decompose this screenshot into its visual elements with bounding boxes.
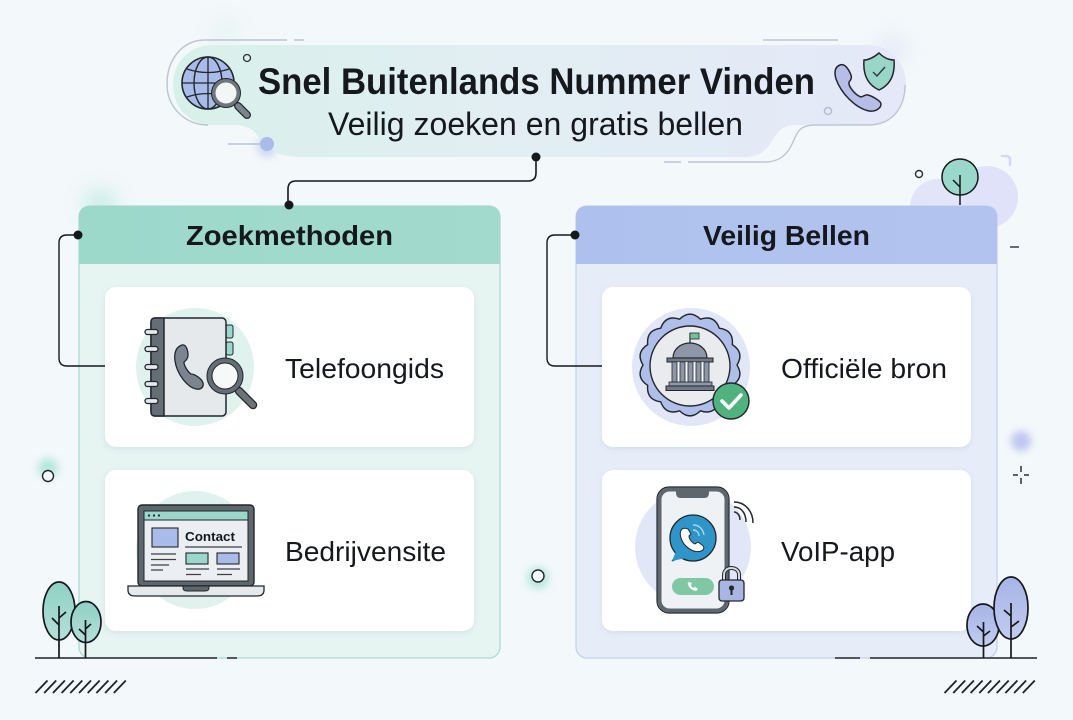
heading: Veilig Bellen: Veilig Bellen (703, 220, 870, 251)
label: Contact: Contact (185, 529, 236, 544)
decorative glows (38, 18, 908, 589)
connector: banner to left panel (284, 152, 540, 210)
title: Snel Buitenlands Nummer Vinden (258, 61, 815, 102)
hatching left (36, 680, 126, 693)
connector: left panel to Telefoongids (59, 230, 105, 366)
small ring left (42, 470, 54, 482)
card: VoIP-app (602, 470, 971, 631)
card: Officiële bron (602, 287, 971, 447)
label: Bedrijvensite: Bedrijvensite (285, 536, 446, 567)
header banner (167, 40, 906, 162)
panel: Zoekmethoden (79, 206, 500, 658)
sparkle (1013, 466, 1029, 484)
glow right (1011, 431, 1031, 451)
subtitle: Veilig zoeken en gratis bellen (328, 106, 743, 142)
icon: official seal with building (632, 308, 750, 426)
card: Bedrijvensite (105, 470, 474, 631)
trees left (43, 582, 101, 658)
icon: phone and shield (835, 53, 894, 111)
ground line left (35, 657, 237, 659)
banner outline left (167, 40, 304, 125)
icon: laptop with contact page (128, 491, 264, 609)
panel header: Veilig Bellen (576, 206, 997, 264)
panel: Veilig Bellen (576, 206, 997, 658)
icon: tree on right panel (942, 159, 978, 205)
icon: phone with VoIP app and lock (635, 487, 753, 613)
icon: globe with magnifier (182, 57, 247, 115)
label: Telefoongids: Telefoongids (285, 353, 444, 384)
ground line right (835, 657, 1037, 659)
decorative blobs behind right panel (910, 156, 1018, 235)
small ring (244, 54, 250, 62)
card: Telefoongids (105, 287, 474, 447)
hatching right (944, 680, 1035, 693)
small ring near tree (916, 170, 922, 178)
accent node (228, 137, 274, 151)
heading: Zoekmethoden: Zoekmethoden (186, 220, 393, 251)
label: Officiële bron: Officiële bron (781, 353, 947, 384)
small ring right (824, 108, 832, 114)
trees right (967, 577, 1028, 658)
banner outline right (664, 40, 905, 162)
label: VoIP-app: VoIP-app (781, 536, 895, 567)
dash right (1010, 246, 1019, 248)
panel header: Zoekmethoden (79, 206, 500, 264)
connector: right panel to Officiële bron (547, 230, 602, 366)
icon: phone book with magnifier (136, 308, 254, 426)
small ring centre (532, 570, 544, 582)
